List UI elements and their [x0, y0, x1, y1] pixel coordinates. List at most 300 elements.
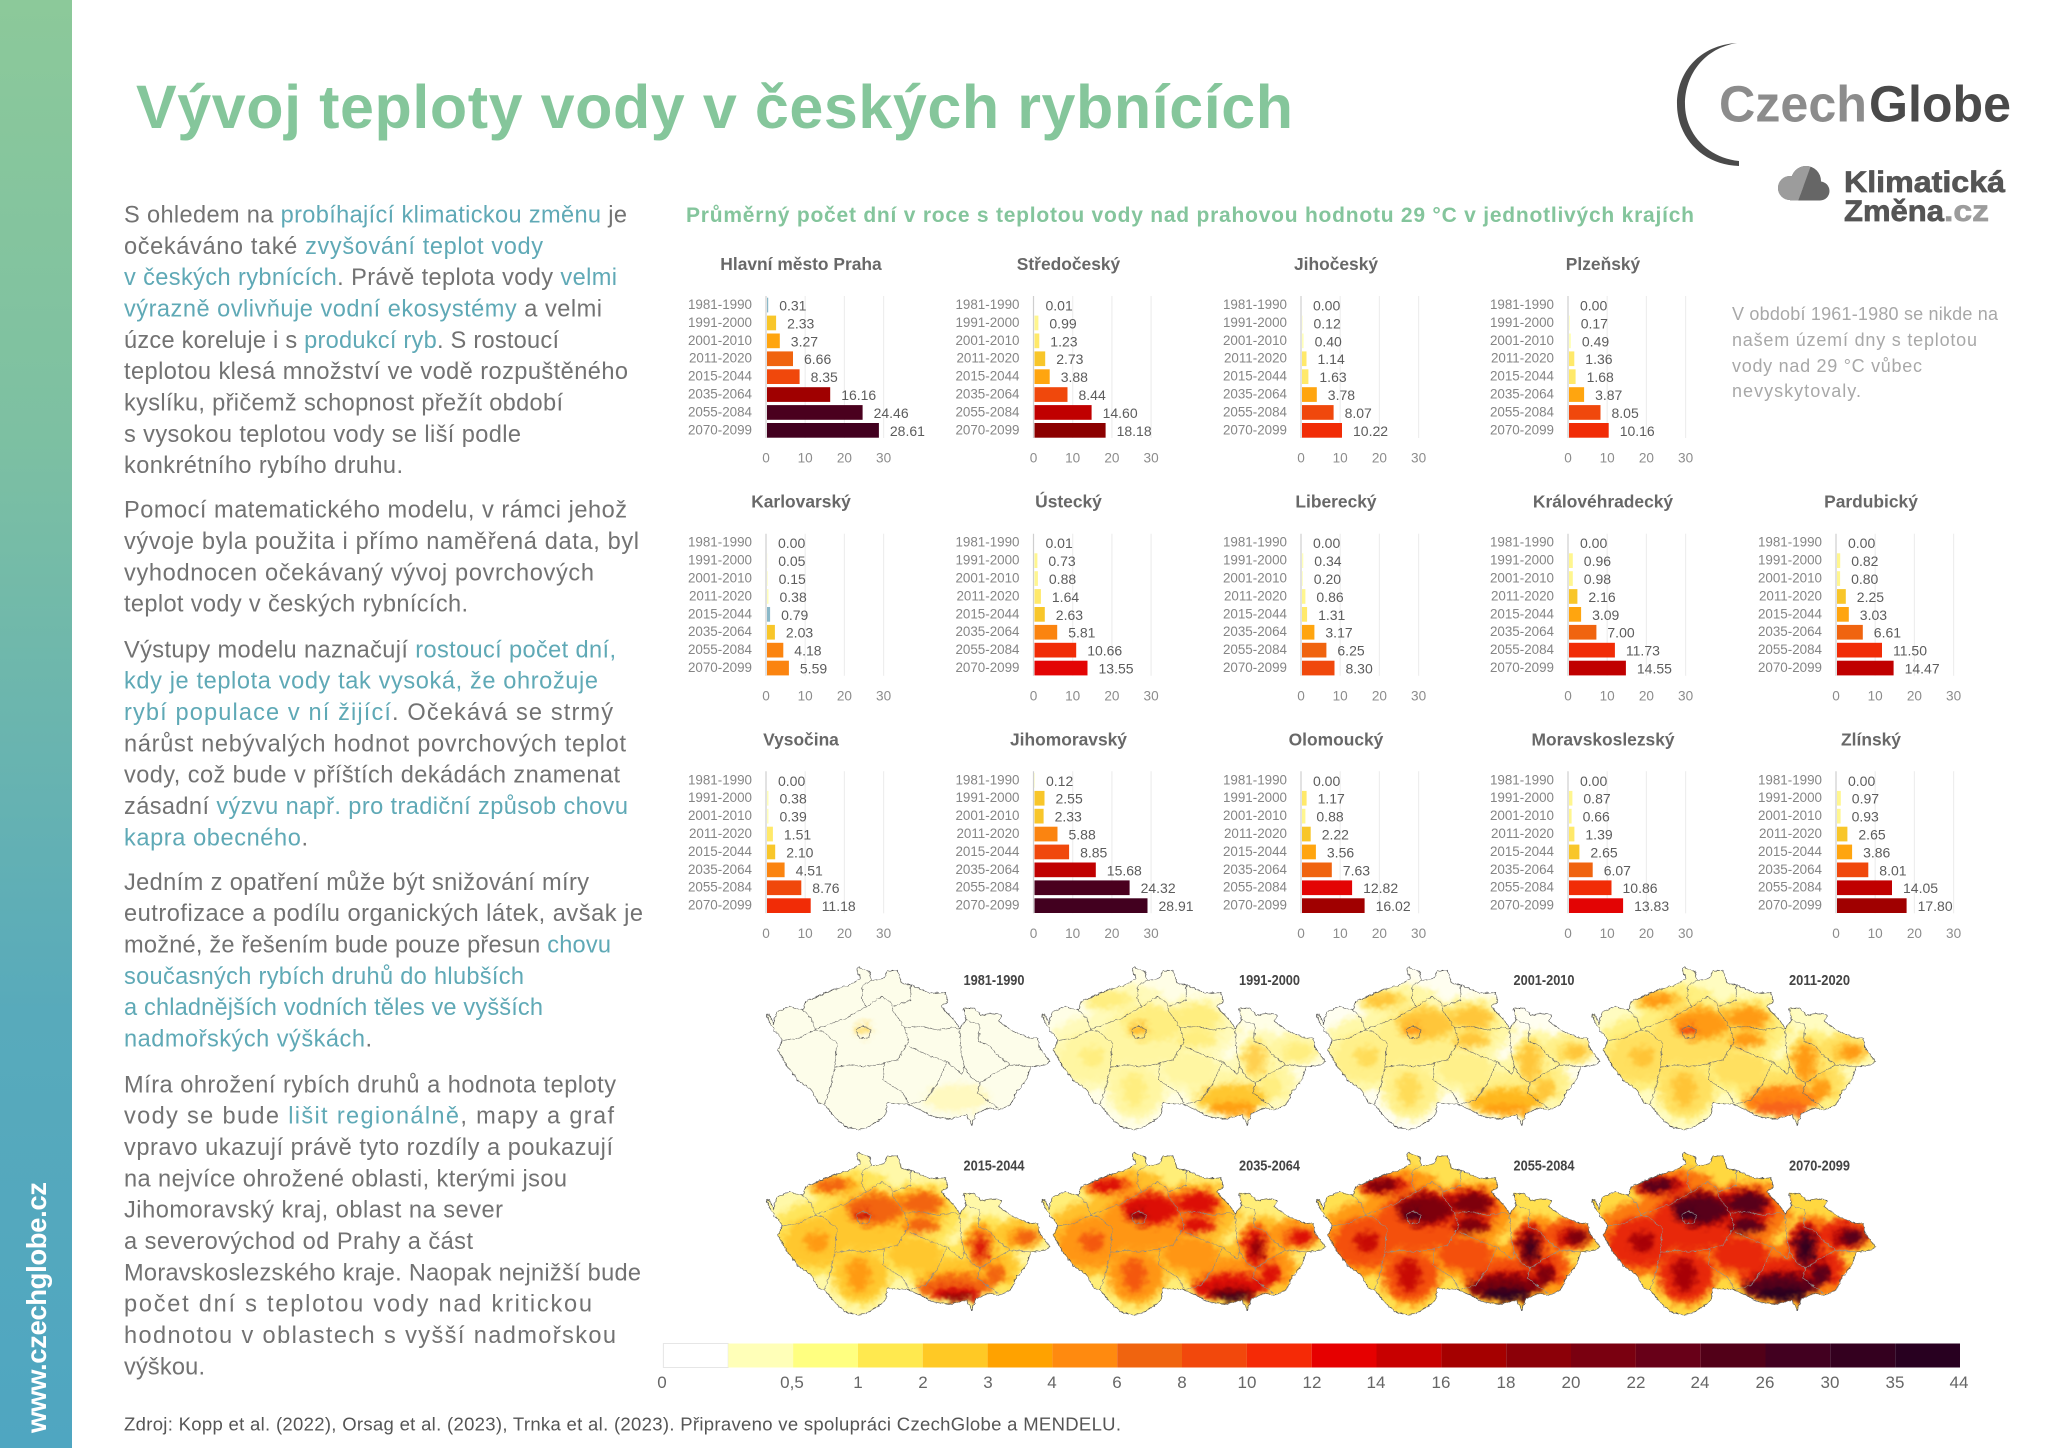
text block: paragraph 2: vývoje byla použita i přímo naměřená data, byl	[124, 529, 639, 555]
bar chart: Pardubický: 2015-2044	[1758, 606, 1823, 621]
bar chart: Královéhradecký: 2035-2064	[1490, 624, 1555, 639]
text block: paragraph 4: eutrofizace a podílu organických látek, avšak je	[124, 901, 643, 927]
text block: paragraph 5: Míra ohrožení rybích druhů a hodnota teploty	[124, 1072, 616, 1098]
bar chart: Plzeňský: 0.17	[1581, 315, 1608, 331]
bar chart: Zlínský: 2055-2084	[1758, 880, 1823, 895]
colour scale legend: 18	[1497, 1373, 1515, 1392]
bar chart: Pardubický: 2011-2020	[1759, 588, 1822, 603]
bar chart: Hlavní město Praha: 0	[762, 451, 770, 466]
bar chart: Liberecký: 0.86	[1316, 589, 1344, 605]
bar chart: Olomoucký: 2015-2044	[1223, 844, 1288, 859]
bar chart: Hlavní město Praha: 10	[798, 451, 813, 466]
bar chart: Ústecký: 13.55	[1098, 661, 1134, 677]
bar chart: Vysočina: 4.51	[796, 862, 823, 878]
bar chart: Ústecký: 0.88	[1049, 571, 1076, 587]
bar chart: Plzeňský: 1.68	[1587, 369, 1614, 385]
text block: paragraph 4	[124, 870, 643, 1053]
bar chart: Moravskoslezský: 30	[1678, 926, 1694, 941]
bar chart: Ústecký: Ústecký	[1035, 492, 1102, 512]
bar chart: Ústecký: 30	[1144, 688, 1159, 703]
bar chart: Plzeňský: Plzeňský	[1566, 254, 1641, 274]
bar chart: Královéhradecký: 2070-2099	[1490, 660, 1554, 675]
bar chart: Liberecký: 6.25	[1337, 643, 1365, 659]
bar chart: Pardubický: 3.03	[1860, 607, 1887, 623]
bar chart: Moravskoslezský: Moravskoslezský	[1531, 729, 1675, 749]
bar chart: Plzeňský	[1490, 254, 1694, 466]
bar chart: Vysočina: 1991-2000	[688, 790, 752, 805]
logo: Klimatická Změna: Klimatická	[1844, 166, 2005, 199]
bar chart: Hlavní město Praha: 2055-2084	[688, 404, 753, 419]
bar chart: Ústecký: 1981-1990	[955, 535, 1020, 550]
source note: Zdroj: Kopp et al. (2022), Orsag et al. (2023), Trnka et al. (2023). Připraveno ve spolupráci CzechGlobe a MENDELU.	[124, 1414, 1121, 1434]
bar chart: Vysočina: 11.18	[822, 898, 856, 914]
bar chart: Hlavní město Praha: 20	[837, 451, 852, 466]
bar chart: Plzeňský: 0.49	[1582, 333, 1609, 349]
text block: paragraph 3: zásadní výzvu např. pro tradiční způsob chovu	[124, 794, 628, 820]
text block: paragraph 4: současných rybích druhů do hlubších	[124, 964, 524, 990]
text block: paragraph 4: možné, že řešením bude pouze přesun chovu	[124, 933, 611, 959]
bar chart: Jihočeský: 10	[1333, 451, 1348, 466]
bar chart: Plzeňský: 30	[1678, 451, 1694, 466]
text block: paragraph 5: hodnotou v oblastech s vyšší nadmořskou	[124, 1323, 616, 1349]
bar chart: Plzeňský: 10	[1600, 451, 1615, 466]
bar chart: Ústecký: 2055-2084	[955, 642, 1020, 657]
bar chart: Středočeský: 2015-2044	[955, 369, 1020, 384]
bar chart: Středočeský: 18.18	[1117, 423, 1152, 439]
bar chart: Královéhradecký: 1981-1990	[1490, 535, 1554, 550]
bar chart: Jihočeský: 1981-1990	[1223, 297, 1287, 312]
colour scale legend: 30	[1821, 1373, 1839, 1392]
bar chart: Moravskoslezský: 1.39	[1585, 826, 1613, 842]
bar chart: Karlovarský: 0.00	[778, 535, 805, 551]
bar chart: Pardubický: 0.00	[1848, 535, 1875, 551]
bar chart: Vysočina: 0	[762, 926, 770, 941]
bar chart: Ústecký: 1.64	[1052, 589, 1079, 605]
bar chart: Hlavní město Praha: 2015-2044	[688, 369, 753, 384]
bar chart: Jihočeský: 2011-2020	[1224, 351, 1287, 366]
note: period 1961-1980: V období 1961-1980 se nikde na	[1732, 304, 1999, 324]
bar chart: Vysočina: 0.00	[778, 773, 805, 789]
colour scale legend: 35	[1886, 1373, 1904, 1392]
bar chart: Ústecký: 1991-2000	[955, 553, 1020, 568]
bar chart: Vysočina: 20	[837, 926, 852, 941]
text block: paragraph 4: a chladnějších vodních těles ve vyšších	[124, 995, 543, 1021]
colour scale legend: 0,5	[780, 1373, 804, 1392]
map: 2035-2064	[1041, 1152, 1326, 1316]
bar chart: Jihomoravský: 1981-1990	[955, 772, 1020, 787]
bar chart: Jihomoravský: 15.68	[1107, 862, 1142, 878]
bar chart: Vysočina: 8.76	[812, 880, 840, 896]
bar chart: Karlovarský: 0.79	[781, 607, 809, 623]
text block: paragraph 3: nárůst nebývalých hodnot povrchových teplot	[124, 731, 626, 757]
map: 1991-2000: 1991-2000	[1239, 973, 1300, 989]
bar chart: Jihočeský: 30	[1411, 451, 1427, 466]
text block: paragraph 1	[124, 202, 628, 479]
bar chart: Plzeňský: 2035-2064	[1490, 386, 1555, 402]
bar chart: Jihočeský: 20	[1372, 451, 1387, 466]
bar chart: Ústecký: 2001-2010	[955, 571, 1020, 586]
bar chart: Jihomoravský: 5.88	[1068, 826, 1096, 842]
bar chart: Středočeský: 2011-2020	[956, 351, 1020, 366]
logo: Klimatická Změna	[1778, 166, 2005, 228]
bar chart: Hlavní město Praha: 16.16	[841, 387, 876, 403]
map: 1981-1990	[766, 966, 1051, 1130]
colour scale legend: 22	[1627, 1373, 1645, 1392]
bar chart: Plzeňský: 1981-1990	[1490, 297, 1554, 312]
bar chart: Pardubický: 1981-1990	[1758, 535, 1822, 550]
map: 2001-2010: 2001-2010	[1514, 973, 1574, 989]
bar chart: Jihočeský: 2055-2084	[1223, 404, 1288, 419]
bar chart: Vysočina: 0.38	[780, 791, 807, 807]
bar chart: Středočeský: 30	[1144, 451, 1159, 466]
bar chart: Zlínský: 2001-2010	[1758, 808, 1822, 823]
bar chart: Ústecký: 2015-2044	[955, 606, 1020, 621]
bar chart: Královéhradecký: 0	[1564, 688, 1572, 703]
bar chart: Vysočina: 2015-2044	[688, 844, 753, 859]
bar chart: Zlínský: 2070-2099	[1758, 898, 1822, 913]
bar chart: Karlovarský: 2070-2099	[688, 660, 752, 675]
bar chart: Moravskoslezský: 2.65	[1590, 844, 1618, 860]
text block: paragraph 5: na nejvíce ohrožené oblasti, kterými jsou	[124, 1166, 567, 1192]
bar chart: Liberecký: Liberecký	[1295, 492, 1377, 512]
bar chart: Jihomoravský	[955, 729, 1194, 941]
text block: paragraph 3: vody, což bude v příštích dekádách znamenat	[124, 763, 620, 789]
bar chart: Liberecký: 0.00	[1313, 535, 1340, 551]
bar chart: Zlínský: 2015-2044	[1758, 844, 1823, 859]
bar chart: Zlínský: 0	[1832, 926, 1840, 941]
bar chart: Jihočeský: 3.78	[1328, 387, 1355, 403]
bar chart: Královéhradecký: 2.16	[1588, 589, 1616, 605]
text block: paragraph 5: Jihomoravský kraj, oblast na sever	[124, 1198, 503, 1224]
bar chart: Královéhradecký: 3.09	[1592, 607, 1620, 623]
bar chart: Moravskoslezský: 2015-2044	[1490, 844, 1555, 859]
bar chart: Hlavní město Praha: 1991-2000	[688, 315, 752, 330]
bar chart: Karlovarský: 2.03	[786, 625, 813, 641]
bar chart: Plzeňský: 20	[1639, 451, 1654, 466]
bar chart: Karlovarský	[688, 492, 892, 703]
bar chart: Karlovarský: 1981-1990	[688, 535, 752, 550]
colour scale legend: 26	[1756, 1373, 1774, 1392]
bar chart: Zlínský: 2.65	[1858, 826, 1886, 842]
map: 2015-2044: 2015-2044	[964, 1158, 1024, 1174]
bar chart: Liberecký: 20	[1372, 688, 1387, 703]
bar chart: Liberecký: 2035-2064	[1223, 624, 1288, 639]
bar chart: Karlovarský: 0.05	[778, 553, 806, 569]
bar chart: Moravskoslezský: 0.00	[1580, 773, 1607, 789]
bar chart: Plzeňský: 2001-2010	[1490, 333, 1554, 348]
map: 2011-2020: 2011-2020	[1789, 973, 1850, 989]
bar chart: Olomoucký: 1991-2000	[1223, 790, 1287, 805]
bar chart: Středočeský: 1.23	[1050, 333, 1078, 349]
bar chart: Olomoucký: 0.00	[1313, 773, 1340, 789]
bar chart: Zlínský: 0.00	[1848, 773, 1875, 789]
map: 2011-2020	[1592, 966, 1876, 1130]
bar chart: Zlínský: 0.93	[1852, 809, 1879, 825]
bar chart: Moravskoslezský: 2011-2020	[1491, 826, 1554, 841]
bar chart: Karlovarský: 0.15	[779, 571, 806, 587]
bar chart: Moravskoslezský: 10	[1600, 926, 1615, 941]
bar chart: Královéhradecký: Královéhradecký	[1533, 492, 1673, 512]
sidebar with website address: www.czechglobe.cz	[21, 1182, 52, 1434]
bar chart: Olomoucký: 2001-2010	[1223, 808, 1287, 823]
bar chart: Ústecký: 10	[1065, 688, 1081, 703]
map: 1981-1990: 1981-1990	[964, 973, 1024, 989]
text block: paragraph 5: Moravskoslezského kraje. Naopak nejnižší bude	[124, 1260, 641, 1286]
bar chart: Jihomoravský: 0.12	[1046, 773, 1073, 789]
bar chart: Moravskoslezský: 20	[1639, 926, 1654, 941]
bar chart: Zlínský: 0.97	[1852, 791, 1879, 807]
bar chart: Hlavní město Praha: 28.61	[890, 423, 925, 439]
bar chart: Zlínský: 2011-2020	[1759, 826, 1822, 841]
bar chart: Karlovarský: 0	[762, 688, 770, 703]
text block: paragraph 1: konkrétního rybího druhu.	[124, 453, 403, 479]
colour scale legend: 24	[1691, 1373, 1709, 1392]
bar chart: Pardubický: 0.80	[1851, 571, 1879, 587]
bar chart: Hlavní město Praha: 3.27	[791, 333, 818, 349]
bar chart: Plzeňský: 2070-2099	[1490, 422, 1554, 437]
bar chart: Jihočeský: 2015-2044	[1223, 369, 1288, 384]
text block: paragraph 5: a severovýchod od Prahy a část	[124, 1229, 473, 1255]
bar chart: Olomoucký: 0	[1297, 926, 1305, 941]
bar chart: Zlínský: 3.86	[1863, 844, 1891, 860]
bar chart: Středočeský: 8.44	[1078, 387, 1106, 403]
bar chart: Vysočina	[688, 729, 892, 941]
bar chart: Hlavní město Praha: 1981-1990	[688, 297, 752, 312]
bar chart: Moravskoslezský: 2070-2099	[1490, 898, 1554, 913]
bar chart: Olomoucký: 20	[1372, 926, 1387, 941]
logo: Klimatická Změna: .cz	[1944, 195, 1989, 228]
bar chart: Hlavní město Praha: 2035-2064	[688, 386, 753, 402]
text block: paragraph 5	[124, 1072, 641, 1380]
bar chart: Moravskoslezský: 10.86	[1622, 880, 1658, 896]
bar chart: Hlavní město Praha: 0.31	[779, 298, 807, 314]
bar chart: Olomoucký: 2.22	[1322, 826, 1349, 842]
logo: Klimatická Změna: Změna	[1844, 195, 1944, 228]
bar chart: Jihomoravský: 28.91	[1158, 898, 1194, 914]
text block: paragraph 1: očekáváno také zvyšování teplot vody	[124, 234, 543, 260]
bar chart: Plzeňský: 0.00	[1580, 298, 1607, 314]
bar chart: Olomoucký	[1223, 729, 1427, 941]
bar chart: Královéhradecký: 0.96	[1584, 553, 1611, 569]
text block: paragraph 5: vpravo ukazují právě tyto rozdíly a poukazují	[124, 1135, 613, 1161]
bar chart: Královéhradecký: 10	[1600, 688, 1615, 703]
bar chart: Vysočina: 30	[876, 926, 892, 941]
bar chart: Olomoucký: 1.17	[1318, 791, 1345, 807]
bar chart: Pardubický	[1758, 492, 1962, 703]
map: 2001-2010	[1316, 966, 1601, 1130]
bar chart: Vysočina: 2.10	[786, 844, 814, 860]
bar chart: Olomoucký: 30	[1411, 926, 1427, 941]
text block: paragraph 2: vyhodnocen očekávaný vývoj povrchových	[124, 560, 594, 586]
bar chart: Královéhradecký: 14.55	[1637, 661, 1672, 677]
bar chart: Moravskoslezský: 0.66	[1583, 809, 1610, 825]
bar chart: Jihočeský: 1.14	[1318, 351, 1345, 367]
bar chart: Vysočina: Vysočina	[763, 729, 839, 749]
map: 2055-2084	[1316, 1152, 1601, 1316]
text block: paragraph 4: nadmořských výškách.	[124, 1027, 372, 1053]
bar chart: Hlavní město Praha: Hlavní město Praha	[720, 254, 882, 274]
bar chart: Plzeňský: 2015-2044	[1490, 369, 1555, 384]
bar chart: Královéhradecký: 11.73	[1626, 643, 1660, 659]
bar chart: Vysočina: 1981-1990	[688, 772, 752, 787]
text block: paragraph 1: v českých rybnících. Právě teplota vody velmi	[124, 265, 617, 291]
bar chart: Hlavní město Praha: 6.66	[804, 351, 831, 367]
title: Vývoj teploty vody v českých rybnících	[136, 73, 1293, 141]
bar chart: Středočeský: 20	[1104, 451, 1120, 466]
bar chart: Vysočina: 2035-2064	[688, 862, 753, 877]
bar chart: Ústecký: 5.81	[1068, 625, 1096, 641]
text block: paragraph 3: Výstupy modelu naznačují rostoucí počet dní,	[124, 637, 616, 663]
bar chart: Liberecký: 2070-2099	[1223, 660, 1287, 675]
colour scale legend: 1	[853, 1373, 863, 1392]
bar chart: Liberecký: 3.17	[1325, 625, 1353, 641]
bar chart: Královéhradecký: 2011-2020	[1491, 588, 1554, 603]
bar chart: Zlínský: 1981-1990	[1758, 772, 1822, 787]
bar chart: Hlavní město Praha	[688, 254, 925, 466]
bar chart: Královéhradecký: 2015-2044	[1490, 606, 1555, 621]
bar chart: Zlínský: 2035-2064	[1758, 862, 1823, 877]
colour scale legend: 10	[1238, 1373, 1256, 1392]
colour scale legend: 4	[1047, 1373, 1057, 1392]
bar chart: Královéhradecký	[1490, 492, 1694, 703]
bar chart: Královéhradecký: 20	[1639, 688, 1654, 703]
bar chart: Jihočeský: 0	[1297, 451, 1305, 466]
note: period 1961-1980: nevyskytovaly.	[1732, 381, 1861, 401]
bar chart: Olomoucký: 2055-2084	[1223, 880, 1288, 895]
text block: paragraph 3: kdy je teplota vody tak vysoká, že ohrožuje	[124, 669, 598, 695]
bar chart: Jihočeský: 8.07	[1345, 405, 1372, 421]
bar chart: Pardubický: Pardubický	[1824, 492, 1918, 512]
bar chart: Olomoucký: 2070-2099	[1223, 898, 1287, 913]
bar chart: Ústecký: 20	[1104, 688, 1120, 703]
bar chart: Liberecký	[1223, 492, 1427, 703]
bar chart: Ústecký: 2035-2064	[955, 624, 1020, 639]
bar chart: Hlavní město Praha: 24.46	[874, 405, 909, 421]
bar chart: Zlínský: 1991-2000	[1758, 790, 1822, 805]
bar chart: Jihomoravský: 24.32	[1141, 880, 1176, 896]
bar chart: Pardubický: 20	[1907, 688, 1922, 703]
bar chart: Pardubický: 2.25	[1857, 589, 1884, 605]
bar chart: Hlavní město Praha: 2011-2020	[689, 351, 752, 366]
bar chart: Královéhradecký: 7.00	[1607, 625, 1635, 641]
bar chart: Pardubický: 0.82	[1851, 553, 1879, 569]
bar chart: Vysočina: 2011-2020	[689, 826, 752, 841]
bar chart: Královéhradecký: 2055-2084	[1490, 642, 1555, 657]
bar chart: Liberecký: 30	[1411, 688, 1427, 703]
bar chart: Pardubický: 6.61	[1874, 625, 1901, 641]
chart section heading: Průměrný počet dní v roce s teplotou vody nad prahovou hodnotu 29 °C v jednotlivých krajích	[686, 204, 1694, 227]
bar chart: Ústecký: 0.73	[1048, 553, 1076, 569]
bar chart: Jihomoravský: 2011-2020	[956, 826, 1020, 841]
bar chart: Pardubický: 2070-2099	[1758, 660, 1822, 675]
bar chart: Středočeský: 0	[1030, 451, 1038, 466]
colour scale legend: 20	[1562, 1373, 1580, 1392]
bar chart: Karlovarský: 2055-2084	[688, 642, 753, 657]
text block: paragraph 5: počet dní s teplotou vody nad kritickou	[124, 1292, 592, 1318]
text block: paragraph 2: Pomocí matematického modelu, v rámci jehož	[124, 498, 627, 524]
text block: paragraph 2: teplot vody v českých rybnících.	[124, 592, 468, 618]
bar chart: Liberecký: 2055-2084	[1223, 642, 1288, 657]
bar chart: Středočeský: 0.99	[1049, 315, 1077, 331]
bar chart: Zlínský	[1758, 729, 1962, 941]
note: period 1961-1980: našem území dny s teplotou	[1732, 330, 1977, 350]
bar chart: Ústecký: 2011-2020	[956, 588, 1020, 603]
bar chart: Středočeský: 2.73	[1056, 351, 1084, 367]
bar chart: Zlínský: 20	[1907, 926, 1922, 941]
bar chart: Jihomoravský: 2.33	[1055, 809, 1082, 825]
logo: CzechGlobe: Czech	[1719, 76, 1867, 132]
bar chart: Středočeský: 10	[1065, 451, 1081, 466]
bar chart: Jihomoravský: 2015-2044	[955, 844, 1020, 859]
bar chart: Jihočeský: 2035-2064	[1223, 386, 1288, 402]
bar chart: Jihomoravský: 10	[1065, 926, 1081, 941]
bar chart: Liberecký: 1.31	[1318, 607, 1346, 623]
bar chart: Jihomoravský: 1991-2000	[955, 790, 1020, 805]
bar chart: Jihomoravský: 2035-2064	[955, 862, 1020, 877]
bar chart: Karlovarský: 10	[798, 688, 813, 703]
bar chart: Jihočeský: 1.63	[1319, 369, 1347, 385]
bar chart: Jihomoravský: 30	[1144, 926, 1159, 941]
colour scale legend: 6	[1112, 1373, 1122, 1392]
bar chart: Královéhradecký: 0.00	[1580, 535, 1607, 551]
bar chart: Zlínský: 14.05	[1903, 880, 1938, 896]
bar chart: Jihomoravský: 2055-2084	[955, 880, 1020, 895]
colour scale legend: 0	[657, 1373, 667, 1392]
bar chart: Pardubický: 30	[1946, 688, 1962, 703]
bar chart: Jihočeský: 2001-2010	[1223, 333, 1287, 348]
map: 2015-2044	[766, 1152, 1051, 1316]
colour scale legend: 12	[1303, 1373, 1321, 1392]
bar chart: Olomoucký: 12.82	[1363, 880, 1398, 896]
text block: paragraph 3: kapra obecného.	[124, 825, 308, 851]
bar chart: Středočeský	[955, 254, 1159, 466]
bar chart: Pardubický: 14.47	[1905, 661, 1940, 677]
bar chart: Jihočeský: 0.00	[1313, 298, 1340, 314]
bar chart: Karlovarský: Karlovarský	[751, 492, 851, 512]
map: 1991-2000	[1042, 966, 1326, 1130]
bar chart: Plzeňský: 1.36	[1585, 351, 1613, 367]
bar chart: Plzeňský: 2011-2020	[1491, 351, 1554, 366]
bar chart: Zlínský: Zlínský	[1841, 729, 1901, 749]
bar chart: Ústecký: 0.01	[1046, 535, 1073, 551]
bar chart: Moravskoslezský: 2001-2010	[1490, 808, 1554, 823]
bar chart: Hlavní město Praha: 30	[876, 451, 892, 466]
bar chart: Plzeňský: 3.87	[1595, 387, 1623, 403]
bar chart: Moravskoslezský: 2055-2084	[1490, 880, 1555, 895]
bar chart: Středočeský: 3.88	[1061, 369, 1088, 385]
bar chart: Jihomoravský: Jihomoravský	[1010, 729, 1127, 749]
bar chart: Zlínský: 10	[1868, 926, 1883, 941]
bar chart: Královéhradecký: 30	[1678, 688, 1694, 703]
bar chart: Středočeský: 0.01	[1046, 298, 1073, 314]
bar chart: Vysočina: 2055-2084	[688, 880, 753, 895]
text block: paragraph 2	[124, 498, 639, 618]
bar chart: Jihočeský	[1223, 254, 1427, 466]
bar chart: Středočeský: 1991-2000	[955, 315, 1020, 330]
text block: paragraph 5: výškou.	[124, 1354, 205, 1380]
bar chart: Vysočina: 1.51	[784, 826, 811, 842]
bar chart: Ústecký: 0	[1030, 688, 1038, 703]
bar chart: Vysočina: 0.39	[780, 809, 807, 825]
bar chart: Olomoucký: 2035-2064	[1223, 862, 1288, 877]
bar chart: Pardubický: 1991-2000	[1758, 553, 1822, 568]
bar chart: Olomoucký: 2011-2020	[1224, 826, 1287, 841]
map: 2055-2084: 2055-2084	[1514, 1158, 1574, 1174]
text block: paragraph 1: kyslíku, přičemž schopnost přežít období	[124, 390, 563, 416]
bar chart: Olomoucký: 16.02	[1376, 898, 1411, 914]
text block: paragraph 1: úzce koreluje i s produkcí ryb. S rostoucí	[124, 328, 559, 354]
bar chart: Pardubický: 2001-2010	[1758, 571, 1822, 586]
